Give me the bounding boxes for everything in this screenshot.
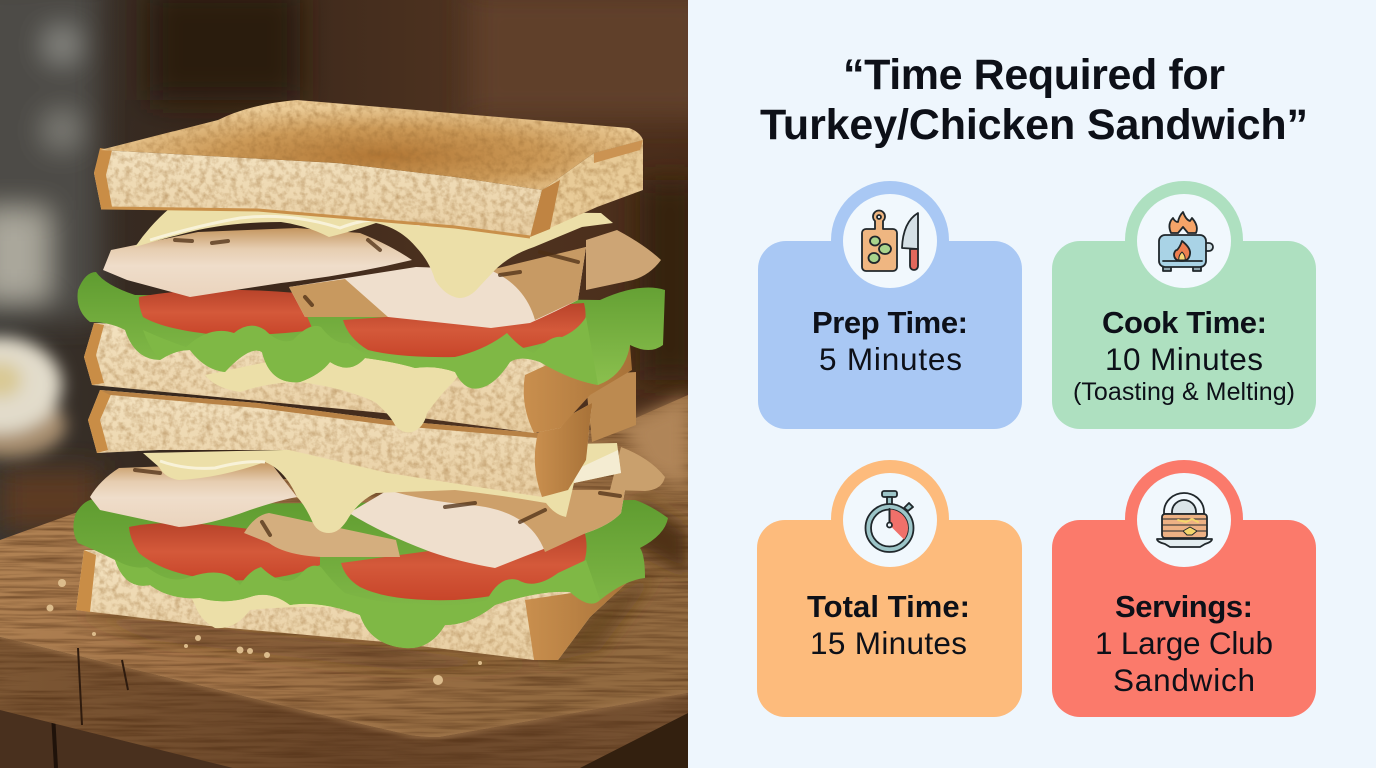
value: 5 Minutes [819,341,962,377]
panel: cook time [1052,181,1316,429]
upper cheese drip [205,355,470,432]
value: 10 Minutes [1105,341,1263,377]
panel: sandwich photo [0,0,710,768]
lower grill marks [135,470,620,535]
lower lettuce front ruffle [111,557,600,648]
icon: cutting board and knife [862,211,918,271]
label: Servings: [1115,589,1253,624]
lower middle bread [88,390,592,497]
top toast side [530,140,643,237]
lower chicken [610,447,665,491]
top toast surface [100,100,643,190]
title [760,51,1308,149]
panel: info background [688,0,1376,768]
board shading [75,395,688,670]
label: Total Time: [807,589,970,624]
lower cheese [143,443,621,533]
cutting board [0,395,688,737]
upper cheese [135,208,613,298]
title: Turkey/Chicken Sandwich” [760,101,1308,149]
value line 2: Sandwich [1113,662,1255,698]
icon: stopwatch [866,491,914,552]
upper lettuce [78,272,665,389]
lower tomatoes [129,523,320,580]
upper tomatoes [139,290,313,335]
lower lettuce [73,499,668,648]
note: (Toasting & Melting) [1073,378,1295,406]
panel: prep time [758,181,1022,429]
upper grill marks [175,240,578,305]
icon: toaster with flame [1159,212,1213,271]
top toast front [94,150,542,237]
bottom cheese [185,585,345,628]
label: Prep Time: [812,305,968,340]
upper bottom bread [84,320,595,433]
blurred background glass and plate [0,0,710,530]
upper lettuce front ruffle [143,317,598,389]
label: Cook Time: [1102,305,1267,340]
value line 1: 1 Large Club [1095,625,1273,661]
back bread [585,372,636,442]
icon: sandwich stack on plate [1157,493,1212,547]
value: 15 Minutes [810,625,967,661]
panel: total time [757,460,1022,717]
title: “Time Required for [843,51,1225,99]
upper chicken [586,230,661,290]
panel: servings [1052,460,1316,717]
crumbs [46,579,482,685]
bottom bread [76,550,633,660]
sandwich illustration [73,100,668,660]
board side [0,637,688,768]
wooden table [0,700,688,768]
